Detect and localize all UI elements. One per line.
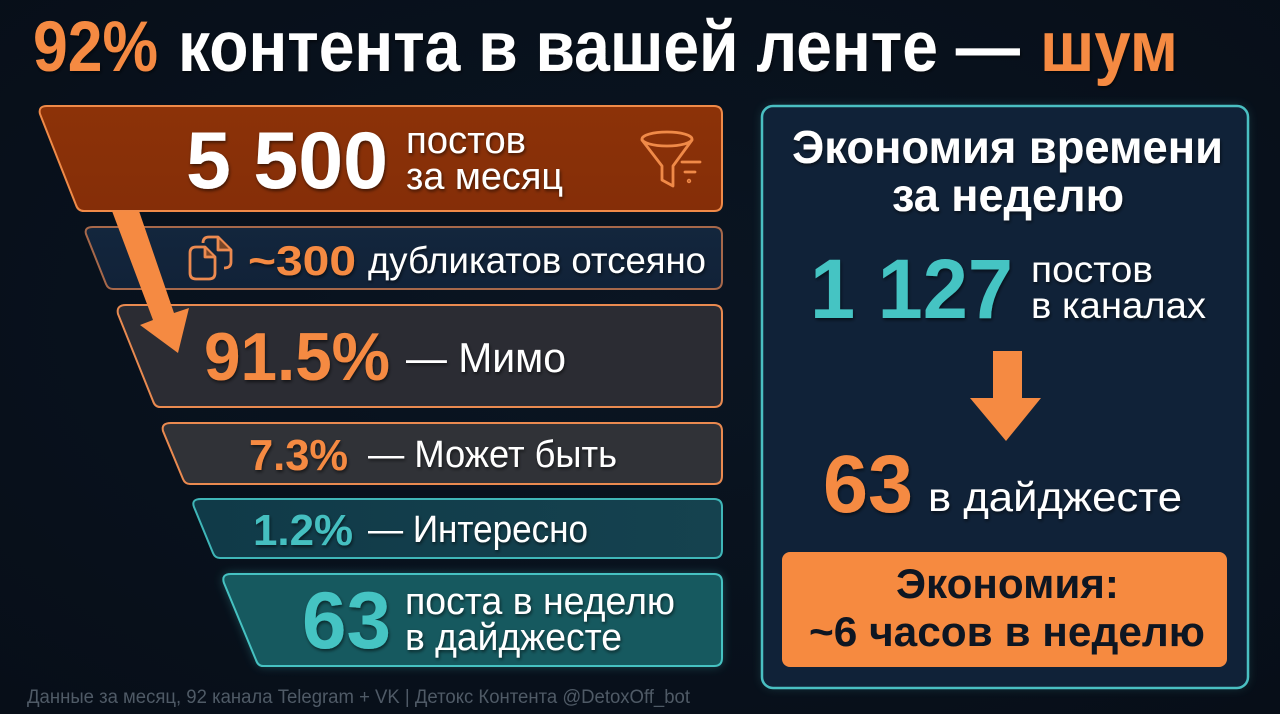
arrow: down bbox=[970, 351, 1041, 441]
funnel panel: duplicates removed bbox=[86, 227, 722, 289]
duplicates label: дубликатов отсеяно bbox=[368, 240, 706, 281]
funnel panel: 91.5% miss bbox=[118, 305, 722, 407]
icon: duplicate documents bbox=[190, 237, 231, 279]
total posts label: за месяц bbox=[406, 156, 563, 198]
interesting label: — Интересно bbox=[368, 509, 588, 551]
callout: savings: ~6 часов в неделю bbox=[809, 608, 1205, 655]
channel posts label bbox=[1031, 249, 1207, 326]
funnel panel: 63 posts in digest bbox=[223, 574, 722, 666]
title: 92% bbox=[33, 8, 158, 87]
footer source note: Данные за месяц, 92 канала Telegram + VK | Детокс Контента @DetoxOff_bot bbox=[27, 687, 691, 708]
panel heading: Экономия времени bbox=[792, 121, 1223, 173]
title: шум bbox=[1040, 8, 1178, 87]
icon: funnel bbox=[642, 132, 700, 186]
digest label bbox=[405, 581, 675, 659]
title: контента в вашей ленте — bbox=[178, 8, 1020, 87]
arrow: funnel diagonal bbox=[112, 211, 189, 353]
panel heading bbox=[792, 121, 1223, 221]
digest label: в дайджесте bbox=[405, 617, 622, 659]
digest label: в дайджесте bbox=[928, 474, 1182, 520]
total posts label: постов bbox=[406, 120, 526, 162]
channel posts number: 1 127 bbox=[810, 242, 1013, 336]
maybe percent: 7.3% bbox=[249, 431, 348, 480]
callout: savings bbox=[782, 552, 1227, 667]
digest label: поста в неделю bbox=[405, 581, 675, 623]
callout: savings: Экономия: bbox=[896, 560, 1119, 607]
digest number: 63 bbox=[823, 439, 913, 530]
channel posts label: постов bbox=[1031, 249, 1153, 290]
total posts number: 5 500 bbox=[186, 116, 388, 206]
channel posts label: в каналах bbox=[1031, 285, 1207, 326]
total posts label bbox=[406, 120, 563, 198]
miss percent: 91.5% bbox=[204, 319, 390, 395]
maybe label: — Может быть bbox=[368, 434, 617, 476]
digest number: 63 bbox=[302, 576, 391, 666]
duplicates count: ~300 bbox=[248, 237, 356, 284]
miss label: — Мимо bbox=[406, 334, 566, 381]
panel heading: за неделю bbox=[892, 169, 1124, 221]
funnel panel: 1.2% interesting bbox=[193, 499, 722, 558]
panel: weekly time savings bbox=[762, 106, 1248, 688]
interesting percent: 1.2% bbox=[253, 506, 353, 555]
funnel panel: 7.3% maybe bbox=[163, 423, 722, 484]
funnel panel: 5 500 posts per month bbox=[40, 106, 722, 211]
